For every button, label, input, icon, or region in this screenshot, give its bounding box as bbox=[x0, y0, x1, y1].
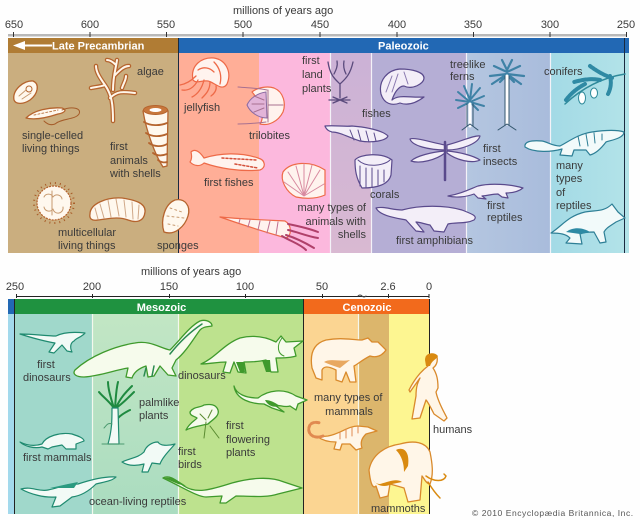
text: many types of reptiles: reptiles bbox=[556, 200, 592, 212]
text: first fishes: first fishes bbox=[204, 177, 254, 189]
text: palmlike plants: palmlike bbox=[139, 397, 179, 409]
era bar: Late Precambrian bbox=[8, 38, 178, 53]
text: humans: humans bbox=[433, 424, 473, 436]
text: first land plants: first bbox=[302, 55, 320, 67]
bottom timeline panel bbox=[6, 266, 473, 515]
era bar: Mesozoic: Mesozoic bbox=[137, 302, 186, 314]
top axis numbers: 600 bbox=[81, 19, 99, 31]
text: first flowering plants: first bbox=[226, 420, 244, 432]
top axis numbers: 250 bbox=[617, 19, 635, 31]
top axis numbers: 500 bbox=[234, 19, 252, 31]
period bands bottom bbox=[8, 314, 430, 514]
icon: jellyfish bbox=[180, 58, 229, 98]
icon: fish (lower) bbox=[325, 126, 388, 142]
text: many types of animals with shells: many types of bbox=[298, 202, 367, 214]
text: first reptiles: reptiles bbox=[487, 212, 523, 224]
era bar: Paleozoic end bbox=[8, 299, 15, 314]
text: first birds: first bbox=[178, 446, 196, 458]
icon: first bird bbox=[122, 442, 175, 472]
icon: reptile with long tail bbox=[525, 130, 624, 156]
text: many types of mammals: mammals bbox=[325, 406, 373, 418]
icon: treelike fern small bbox=[456, 84, 484, 130]
bottom axis numbers: 200 bbox=[83, 281, 101, 293]
text: many types of animals with shells: shells bbox=[338, 229, 366, 241]
era bar: Late Precambrian: Late Precambrian bbox=[52, 40, 145, 52]
era bar: Mesozoic bbox=[15, 299, 304, 314]
bottom axis numbers: 100 bbox=[236, 281, 254, 293]
text: treelike ferns: ferns bbox=[450, 71, 475, 83]
icon: small striped mammal bbox=[309, 422, 377, 450]
text: treelike ferns: treelike bbox=[450, 59, 485, 71]
icon: first amphibian bbox=[376, 206, 475, 232]
era bar: Paleozoic bbox=[178, 38, 629, 53]
text: first dinosaurs: dinosaurs bbox=[23, 372, 71, 384]
icon: shell cone bbox=[143, 106, 168, 167]
text: algae: algae bbox=[137, 66, 164, 78]
icon: palmlike plant bbox=[99, 382, 134, 444]
icon: green mammal bbox=[234, 386, 307, 412]
icon: algae bbox=[91, 60, 135, 121]
icon: treelike fern tall bbox=[490, 60, 524, 130]
bottom axis numbers: 50 bbox=[316, 281, 328, 293]
text: conifers: conifers bbox=[544, 66, 583, 78]
text: multicellular living things: living things bbox=[58, 240, 116, 252]
icon: multicellular disc bbox=[90, 198, 145, 221]
text: many types of mammals: many types of bbox=[314, 392, 383, 404]
bottom axis numbers: 0 bbox=[426, 281, 432, 293]
text: first insects: first bbox=[483, 143, 501, 155]
text: first mammals: first mammals bbox=[23, 452, 92, 464]
top axis numbers: 300 bbox=[541, 19, 559, 31]
bottom axis numbers bbox=[6, 281, 432, 293]
text: corals: corals bbox=[370, 189, 400, 201]
text: sponges: sponges bbox=[157, 240, 199, 252]
text: first insects: insects bbox=[483, 156, 518, 168]
text: fishes: fishes bbox=[362, 108, 391, 120]
icon: dragonfly bbox=[410, 136, 480, 180]
text: single-celled living things: single-celled bbox=[22, 130, 83, 142]
top timeline panel bbox=[5, 5, 635, 253]
icon: mammoth bbox=[369, 442, 446, 502]
top axis numbers: 550 bbox=[157, 19, 175, 31]
era bar: Cenozoic: Cenozoic bbox=[343, 302, 391, 314]
icon: sponge bbox=[163, 200, 189, 233]
text: dinosaurs: dinosaurs bbox=[178, 370, 226, 382]
text: first amphibians: first amphibians bbox=[396, 235, 474, 247]
icon: first dinosaur bbox=[20, 332, 85, 353]
text: first flowering plants: plants bbox=[226, 447, 256, 459]
text: many types of reptiles: of bbox=[556, 187, 566, 199]
icon: multicellular sphere bbox=[34, 183, 74, 223]
icon: single-celled organism with flagellum bbox=[26, 108, 80, 125]
text: many types of animals with shells: animals with bbox=[305, 216, 366, 228]
bottom axis numbers: 250 bbox=[6, 281, 24, 293]
era bar: Paleozoic: Paleozoic bbox=[378, 40, 429, 52]
icon: triceratops bbox=[201, 336, 303, 373]
era bar: Cenozoic bbox=[304, 299, 430, 314]
bottom axis numbers: 2.6 bbox=[380, 281, 396, 293]
icon: single-celled organism round bbox=[14, 81, 37, 103]
icon: human bbox=[409, 353, 447, 421]
icon: first flower bbox=[186, 405, 219, 438]
text: first reptiles: first bbox=[487, 200, 505, 212]
period bands top bbox=[8, 53, 629, 253]
text: mammoths: mammoths bbox=[371, 503, 426, 515]
icon: mammal-like reptile bbox=[551, 204, 625, 244]
icon: first mammal bbox=[20, 433, 84, 449]
bottom axis numbers: 150 bbox=[160, 281, 178, 293]
text: palmlike plants: plants bbox=[139, 410, 169, 422]
top axis numbers: 400 bbox=[388, 19, 406, 31]
text: many types of reptiles: many bbox=[556, 160, 583, 172]
text: first flowering plants: flowering bbox=[226, 434, 270, 446]
bottom axis label: millions of years ago bbox=[141, 266, 241, 278]
text: first land plants: land bbox=[302, 69, 323, 81]
text: first land plants: plants bbox=[302, 83, 332, 95]
text: ocean-living reptiles: ocean-living reptiles bbox=[89, 496, 187, 508]
icon: land plant bbox=[328, 61, 353, 103]
top axis numbers bbox=[5, 19, 635, 31]
icon: scallop shell bbox=[282, 163, 325, 198]
text: trilobites: trilobites bbox=[249, 130, 290, 142]
text: multicellular living things: multicellular bbox=[58, 227, 116, 239]
text: first animals with shells: animals bbox=[110, 155, 148, 167]
text: first animals with shells: first bbox=[110, 141, 128, 153]
icon: many-horned mammal bbox=[311, 338, 386, 382]
text: jellyfish: jellyfish bbox=[183, 102, 220, 114]
icon: trilobite bbox=[238, 87, 284, 124]
top axis ruler bbox=[8, 32, 626, 37]
bottom axis ruler bbox=[16, 294, 429, 298]
icon: nautiloid bbox=[220, 217, 318, 250]
text: first dinosaurs: first bbox=[37, 359, 55, 371]
icon: ocean reptile left bbox=[21, 477, 116, 507]
copyright: © 2010 Encyclopædia Britannica, Inc. bbox=[472, 508, 634, 518]
text: first birds: birds bbox=[178, 459, 202, 471]
icon: conifer branch bbox=[565, 66, 625, 104]
top axis numbers: 650 bbox=[5, 19, 23, 31]
text: many types of reptiles: types bbox=[556, 173, 583, 185]
icon: first reptile bbox=[448, 184, 523, 199]
icon: coral bbox=[355, 155, 392, 188]
top axis numbers: 350 bbox=[464, 19, 482, 31]
text: first animals with shells: with shells bbox=[109, 168, 161, 180]
top axis numbers: 450 bbox=[311, 19, 329, 31]
icon: long-necked dinosaur bbox=[74, 320, 212, 378]
icon: first fish bbox=[190, 150, 264, 171]
text: single-celled living things: living things bbox=[22, 143, 80, 155]
icon: fish (upper) bbox=[380, 69, 424, 104]
icon: ocean reptile right bbox=[163, 477, 302, 503]
top axis label: millions of years ago bbox=[233, 5, 333, 17]
